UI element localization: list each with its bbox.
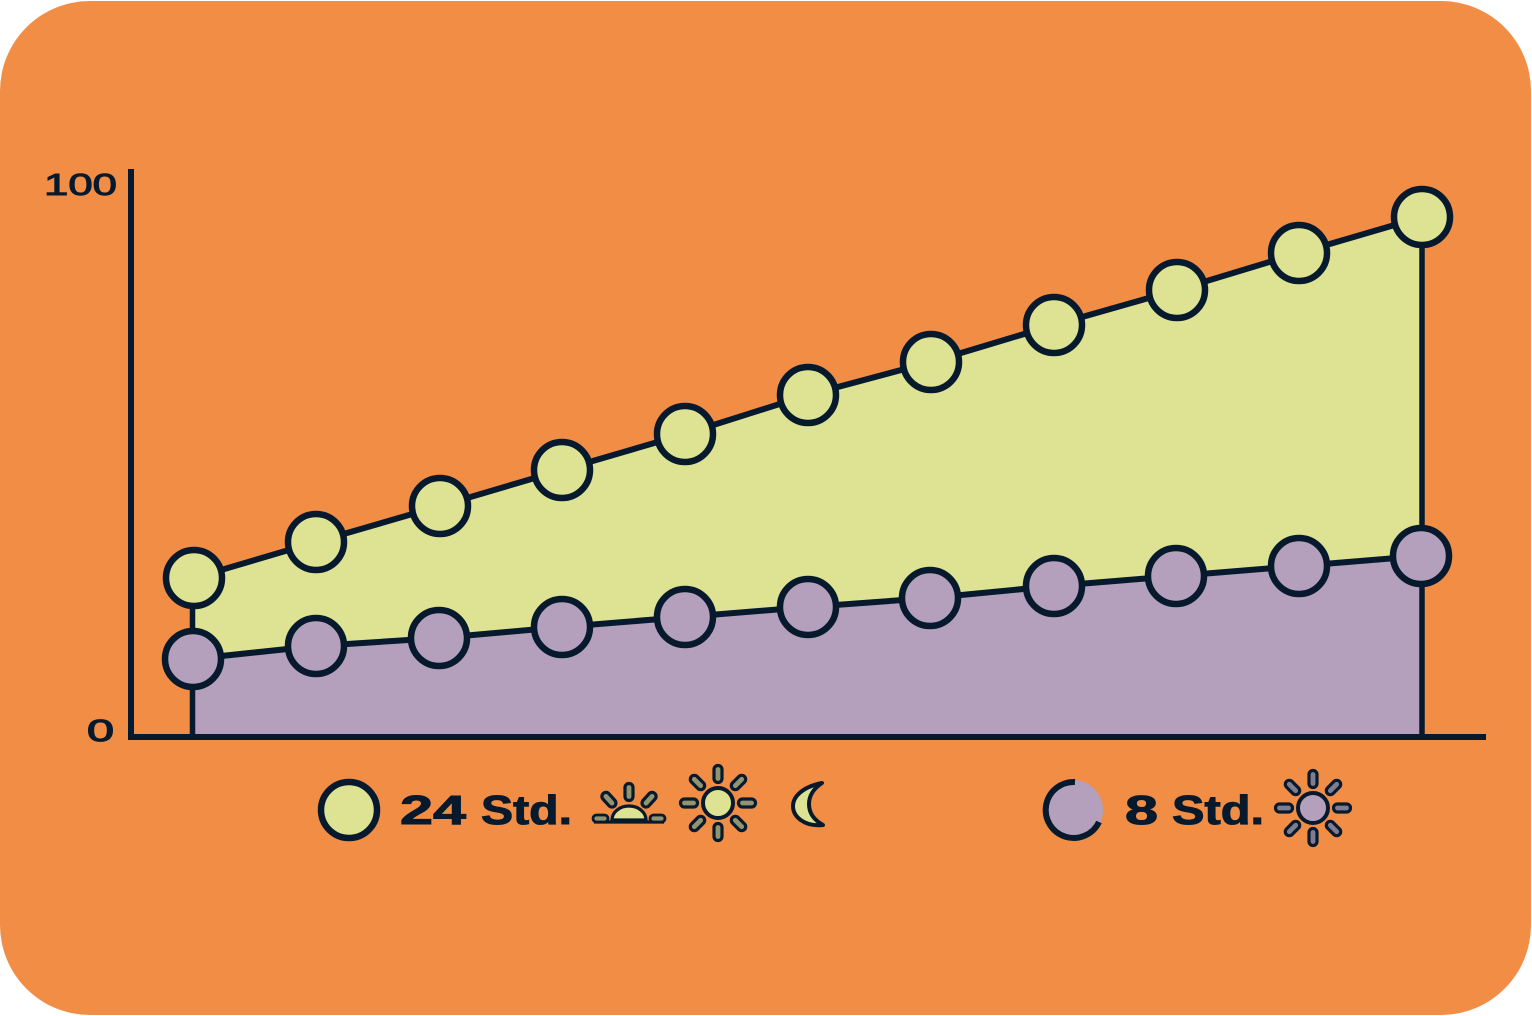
area: 8 Std. series xyxy=(193,556,1421,737)
line: 24 Std. series xyxy=(194,217,1422,578)
legend: 8 Std. xyxy=(1043,770,1350,846)
icon: sunrise xyxy=(593,784,665,822)
icon: sun xyxy=(1276,770,1350,846)
axes xyxy=(131,169,1486,737)
legend label: 24 Std.: Std. xyxy=(481,787,572,833)
line: 8 Std. series xyxy=(193,556,1421,659)
markers: 24 Std. series xyxy=(166,189,1450,606)
legend marker: green circle xyxy=(321,782,377,838)
icon: sun xyxy=(680,766,756,840)
legend label: 24 Std.: 24 xyxy=(400,787,466,833)
legend label: 8 Std.: Std. xyxy=(1172,787,1264,833)
markers: 8 Std. series xyxy=(165,528,1449,687)
drop lines xyxy=(192,217,1422,737)
legend: 24 Std. xyxy=(321,766,823,840)
axis label: 100: 100 xyxy=(44,167,117,202)
area: 24 Std. series xyxy=(194,217,1422,737)
legend label: 8 Std.: 8 xyxy=(1125,787,1158,833)
chart: area line chart xyxy=(131,169,1486,737)
legend marker: partial purple circle xyxy=(1043,780,1103,840)
icon: moon xyxy=(793,783,823,825)
axis label: 0: 0 xyxy=(87,713,114,748)
